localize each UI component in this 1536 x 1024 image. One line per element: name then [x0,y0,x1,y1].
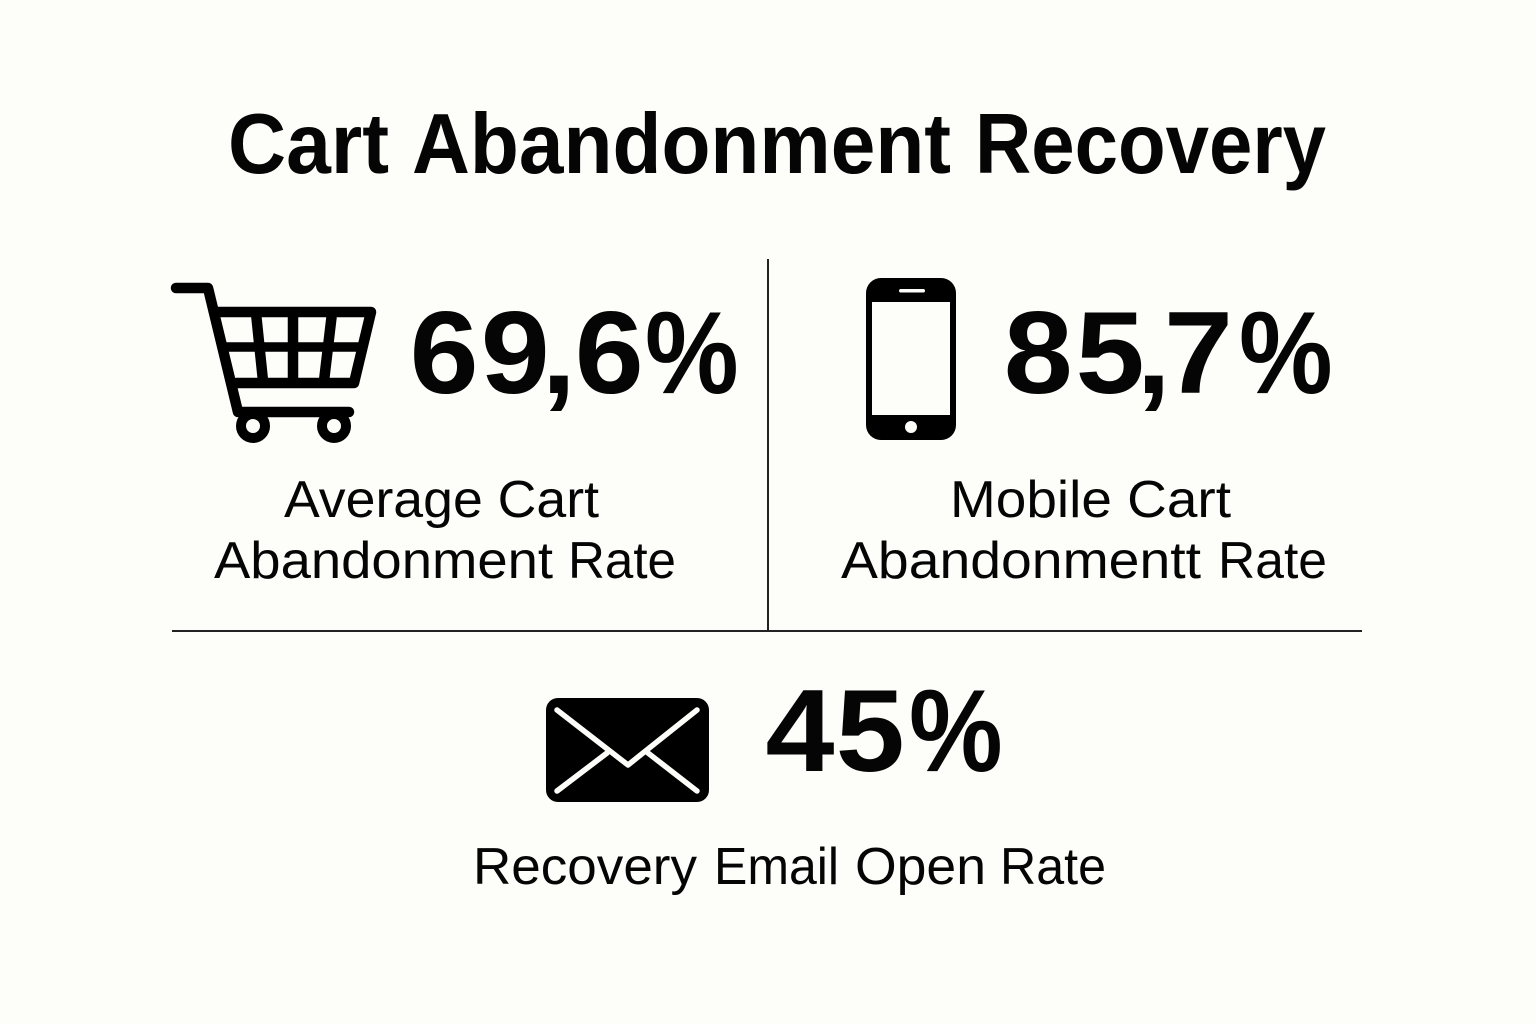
panel: recovery email open rate [473,665,1106,896]
label: recovery email open rate: Recovery [473,838,697,896]
label: average cart abandonment rate: Average Cart [284,471,600,529]
label: mobile cart abandonment rate: Mobile Cart [950,471,1232,529]
icon: shopping cart [176,288,371,438]
stat: 69,6%: 69,6 [410,287,644,418]
label: mobile cart abandonment rate: Rate [1218,532,1327,590]
title: Recovery [975,97,1326,192]
label: recovery email open rate: Rate [1000,838,1106,896]
panel: average cart abandonment [176,287,739,590]
stat: 45%: 45 [766,665,905,796]
stat: 85,7%: % [1239,287,1333,418]
label: mobile cart abandonment rate: Abandonmentt [841,532,1202,590]
stat: 69,6%: % [645,287,739,418]
label: average cart abandonment rate: Rate [568,532,676,590]
label: recovery email open rate: Open [855,838,986,896]
label: average cart abandonment rate [214,471,676,590]
label: average cart abandonment rate: Abandonment [214,532,554,590]
title: Abandonment [412,97,951,192]
title: Cart [228,97,389,192]
stat: 85,7%: 85,7 [1004,287,1233,418]
label: mobile cart abandonment rate [841,471,1327,590]
panel: mobile cart abandonment [841,278,1333,590]
stat: 85,7% [1004,287,1333,418]
icon: envelope [546,698,709,802]
stat: 45% [766,665,1003,796]
icon: smartphone [866,278,956,440]
label: recovery email open rate: Email [714,838,839,896]
stat: 45%: % [909,665,1003,796]
